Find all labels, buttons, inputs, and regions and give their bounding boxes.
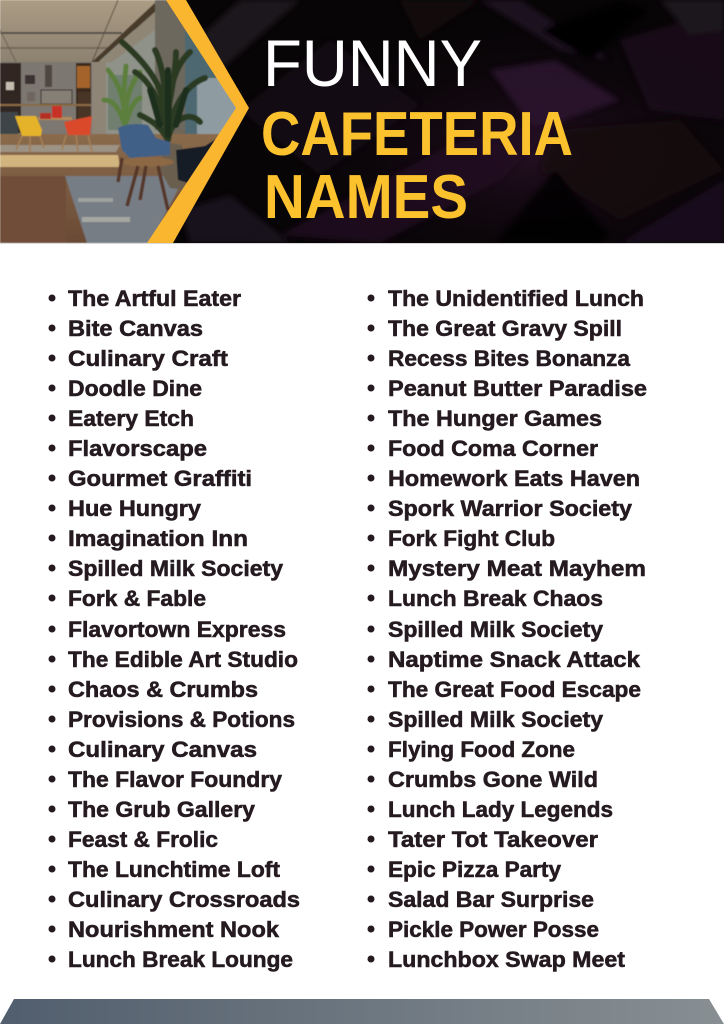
right column list: Homework Eats Haven [388, 466, 640, 491]
right column list: Mystery Meat Mayhem [388, 556, 646, 581]
right column list: Salad Bar Surprise [388, 887, 594, 912]
right column list: Lunch Break Chaos [388, 586, 603, 611]
right column list [368, 286, 647, 972]
left column list: Doodle Dine [68, 376, 202, 401]
left column list: Imagination Inn [68, 526, 248, 551]
left column list: The Lunchtime Loft [68, 857, 281, 882]
right column list: Spilled Milk Society [388, 707, 604, 732]
left column list: The Grub Gallery [68, 797, 256, 822]
right column list: Fork Fight Club [388, 526, 555, 551]
yellow chevron divider [147, 0, 249, 243]
right column list: Lunchbox Swap Meet [388, 947, 626, 972]
right column list: The Unidentified Lunch [388, 286, 644, 311]
left column list: Provisions & Potions [68, 707, 295, 732]
right column list: Pickle Power Posse [388, 917, 599, 942]
left column list: Flavorscape [68, 436, 207, 461]
left column list: Fork & Fable [68, 586, 206, 611]
left column list: Spilled Milk Society [68, 556, 284, 581]
right column list: The Great Gravy Spill [388, 316, 622, 341]
left column list: Lunch Break Lounge [68, 947, 293, 972]
right column list: Recess Bites Bonanza [388, 346, 631, 371]
left column list: Hue Hungry [68, 496, 202, 521]
left column list: The Flavor Foundry [68, 767, 283, 792]
left column list [48, 286, 300, 972]
left column list: Feast & Frolic [68, 827, 218, 852]
right column list: Crumbs Gone Wild [388, 767, 598, 792]
right column list: Spork Warrior Society [388, 496, 633, 521]
footer band [0, 999, 724, 1024]
left column list: Culinary Canvas [68, 737, 257, 762]
right column list: Epic Pizza Party [388, 857, 562, 882]
right column list: Naptime Snack Attack [388, 647, 641, 672]
left column list: Gourmet Graffiti [68, 466, 252, 491]
title line: FUNNY: FUNNY [263, 26, 482, 100]
title line: NAMES: NAMES [264, 163, 468, 232]
dark geometric background [150, 0, 724, 243]
cafeteria interior photo [0, 0, 245, 243]
left column list: The Artful Eater [68, 286, 241, 311]
left column list: The Edible Art Studio [68, 647, 298, 672]
left column list: Flavortown Express [68, 617, 286, 642]
right column list: Food Coma Corner [388, 436, 598, 461]
right column list: Tater Tot Takeover [388, 827, 598, 852]
right column list: The Great Food Escape [388, 677, 641, 702]
left column list: Nourishment Nook [68, 917, 280, 942]
window area [100, 30, 160, 140]
right column list: Spilled Milk Society [388, 617, 604, 642]
right column list: The Hunger Games [388, 406, 602, 431]
header banner [0, 0, 724, 244]
left column list: Bite Canvas [68, 316, 203, 341]
potted plants [104, 42, 205, 140]
right column list: Lunch Lady Legends [388, 797, 613, 822]
title [261, 26, 573, 232]
right column list: Peanut Butter Paradise [388, 376, 647, 401]
left column list: Culinary Craft [68, 346, 229, 371]
left column list: Eatery Etch [68, 406, 194, 431]
left column list: Culinary Crossroads [68, 887, 300, 912]
floor [0, 134, 240, 243]
dining set [38, 117, 72, 120]
left column list: Chaos & Crumbs [68, 677, 258, 702]
title line: CAFETERIA: CAFETERIA [261, 100, 573, 169]
right column list: Flying Food Zone [388, 737, 575, 762]
